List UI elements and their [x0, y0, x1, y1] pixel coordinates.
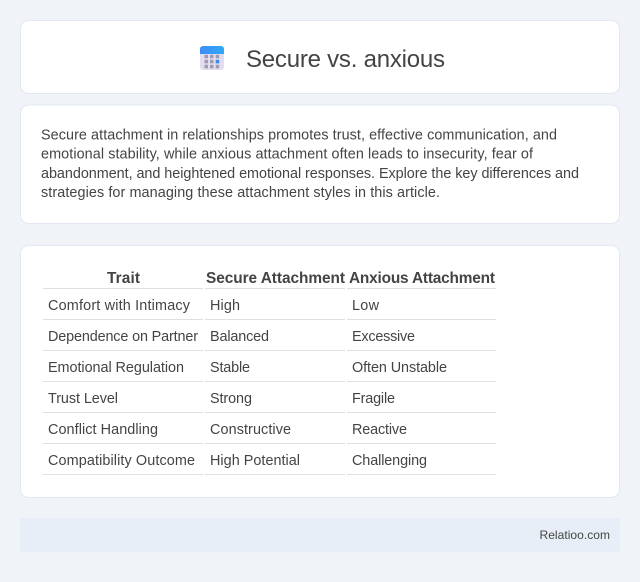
table header: Secure Attachment [206, 270, 345, 287]
row: comfort with intimacy: Comfort with Intimacy [48, 298, 191, 314]
footer credit: Relatioo.com [540, 528, 610, 542]
row: comfort with intimacy: Low [352, 298, 380, 314]
row: emotional regulation: Stable [210, 360, 250, 376]
icon: calendar [200, 46, 224, 70]
row: compatibility outcome: Compatibility Outcome [48, 453, 195, 469]
row: emotional regulation [48, 360, 447, 376]
row: trust level: Fragile [352, 391, 395, 407]
row: compatibility outcome [48, 453, 427, 469]
table header: Anxious Attachment [349, 270, 495, 287]
row: emotional regulation: Emotional Regulation [48, 360, 184, 376]
row: compatibility outcome: Challenging [352, 453, 427, 469]
row: trust level: Trust Level [48, 391, 118, 407]
intro text: emotional stability, while anxious attachment often leads to insecurity, fear of [41, 147, 534, 163]
row: comfort with intimacy [48, 298, 380, 314]
comparison table panel [20, 246, 620, 498]
row: conflict handling [48, 422, 407, 438]
table rules [43, 288, 496, 475]
table header [107, 270, 495, 287]
intro text: abandonment, and heightened emotional responses. Explore the key differences and [41, 166, 579, 182]
intro text [41, 127, 579, 201]
row: dependence on partner: Dependence on Partner [48, 329, 198, 345]
row: trust level: Strong [210, 391, 252, 407]
intro panel [20, 105, 620, 224]
intro text: Secure attachment in relationships promotes trust, effective communication, and [41, 127, 557, 143]
header card [20, 20, 620, 94]
row: compatibility outcome: High Potential [210, 453, 300, 469]
row: emotional regulation: Often Unstable [352, 360, 447, 376]
title: Secure vs. anxious [246, 46, 445, 73]
row: dependence on partner [48, 329, 415, 345]
row: conflict handling: Constructive [210, 422, 291, 438]
table header: Trait [107, 270, 140, 287]
footer bar [20, 518, 620, 552]
row: conflict handling: Conflict Handling [48, 422, 158, 438]
row: trust level [48, 391, 395, 407]
row: dependence on partner: Excessive [352, 329, 415, 345]
row: dependence on partner: Balanced [210, 329, 269, 345]
intro text: strategies for managing these attachment styles in this article. [41, 185, 440, 201]
row: conflict handling: Reactive [352, 422, 407, 438]
row: comfort with intimacy: High [210, 298, 240, 314]
